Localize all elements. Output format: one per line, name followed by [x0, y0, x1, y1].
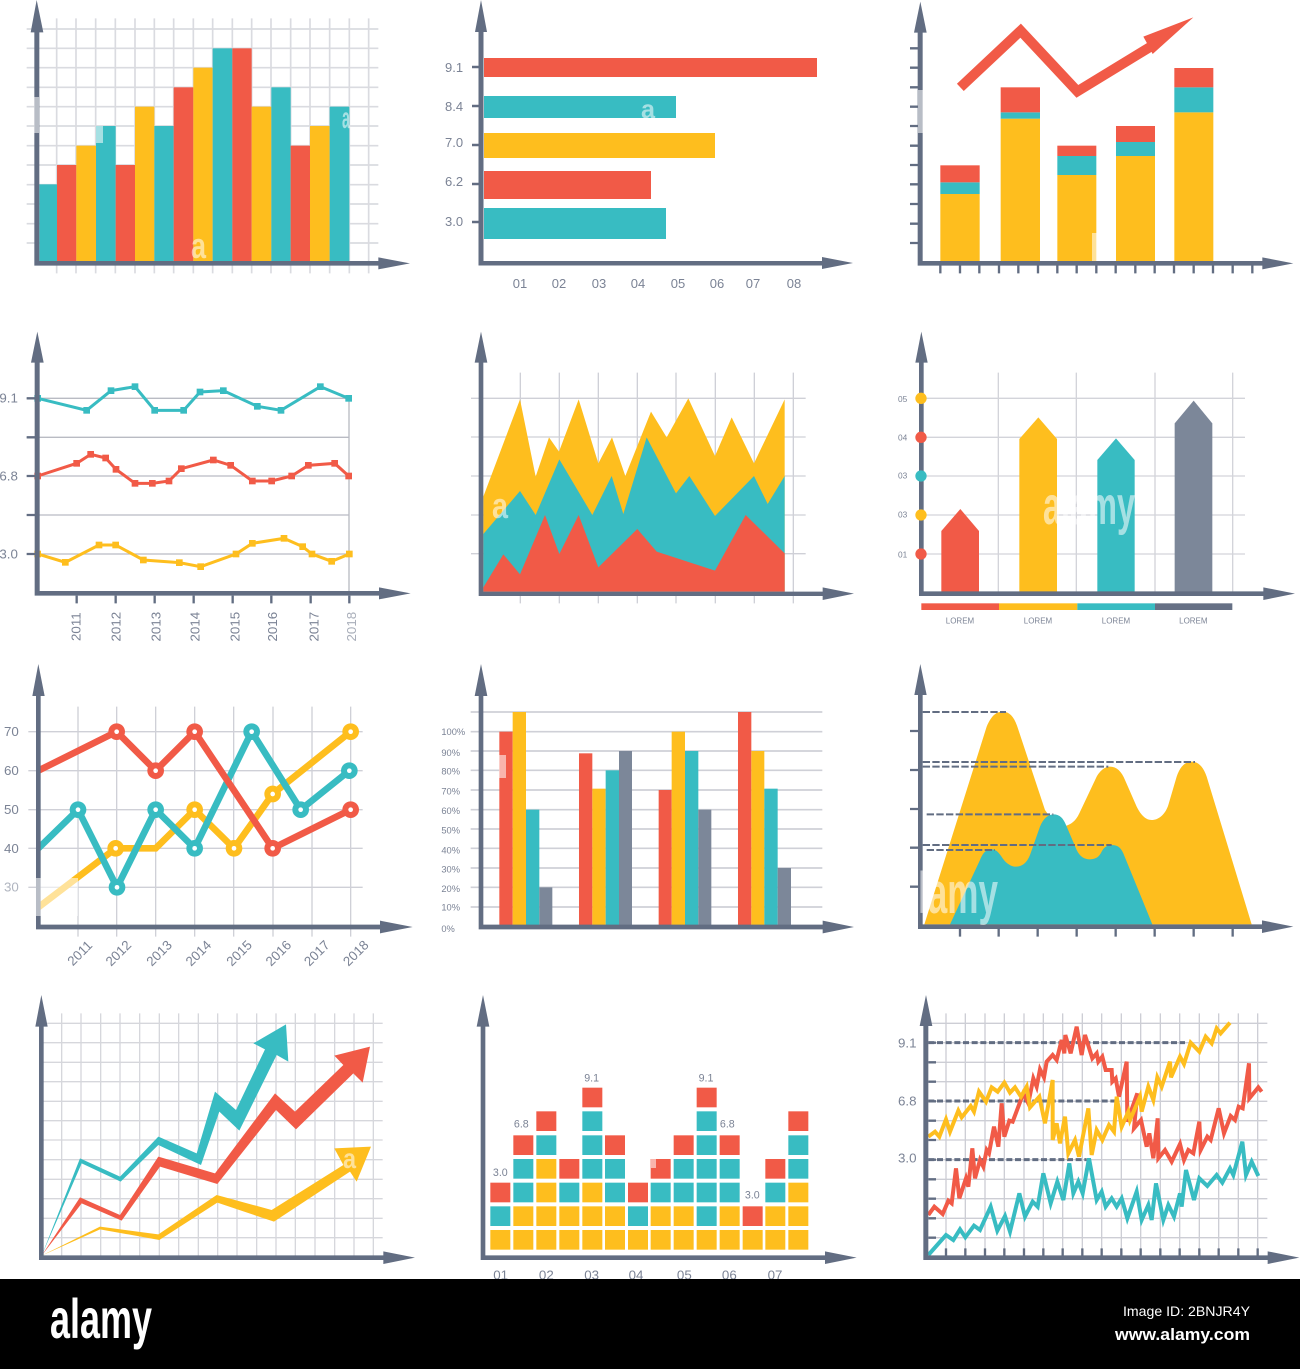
axis labels: 02: [539, 1267, 554, 1282]
value labels: 3.0: [493, 1167, 508, 1179]
axes: [32, 664, 413, 933]
year labels: 2011: [64, 938, 95, 969]
year labels: 2015: [228, 612, 243, 641]
axis labels: 01: [898, 550, 908, 560]
axis labels: 06: [710, 276, 724, 291]
percent labels: 60%: [441, 806, 460, 816]
watermark fragments: a: [342, 102, 350, 135]
value labels: [4, 724, 19, 894]
watermark fragments: lamy: [918, 861, 998, 926]
year labels: 2017: [306, 612, 321, 641]
yellow blocks: [490, 1159, 808, 1250]
percent labels: 40%: [441, 845, 460, 855]
axis labels: 04: [629, 1267, 644, 1282]
watermark fragments: alamy: [1043, 476, 1135, 536]
panel: horizontal bar chart: [445, 0, 853, 291]
axis labels: 07: [746, 276, 760, 291]
teal line: [928, 1142, 1258, 1255]
year labels: 2012: [103, 937, 134, 969]
year labels: [64, 937, 372, 969]
red line: [34, 451, 352, 487]
axis labels: 04: [631, 276, 645, 291]
panel: stacked area chart: [471, 332, 854, 603]
percent labels: 50%: [441, 825, 460, 835]
axis labels: [513, 276, 801, 291]
yellow line: [34, 535, 353, 570]
icon: yellow arrow: [42, 1147, 371, 1256]
value labels: 60: [4, 763, 19, 778]
footer bar: [0, 1279, 1300, 1369]
percent labels: 70%: [441, 787, 460, 797]
panel: grouped column chart: [27, 0, 410, 273]
axis labels: 05: [677, 1267, 692, 1282]
teal blocks: [490, 1111, 808, 1226]
percent labels: 100%: [441, 727, 465, 737]
value labels: 6.2: [445, 174, 463, 189]
year labels: 2013: [148, 612, 163, 641]
axis labels: 05: [898, 394, 908, 404]
watermark fragments: a: [343, 1143, 356, 1174]
year labels: 2014: [188, 611, 203, 641]
year labels: 2018: [340, 937, 372, 969]
axes: [475, 332, 854, 600]
panel: line chart with square markers: [0, 332, 411, 641]
dashed guide lines: [923, 712, 1195, 850]
percent labels: 90%: [441, 748, 460, 758]
yellow line: [928, 1023, 1230, 1157]
teal line: [38, 723, 358, 896]
axes: [914, 664, 1293, 933]
value labels: 6.8: [898, 1093, 917, 1108]
axis labels: 03: [584, 1267, 599, 1282]
value labels: [493, 1073, 760, 1202]
panel: block column chart: [477, 995, 857, 1282]
axis labels: 01: [513, 276, 527, 291]
red blocks: [490, 1088, 808, 1226]
legend: LOREM: [1179, 616, 1208, 625]
value labels: 8.4: [445, 99, 463, 114]
arrow columns: [941, 401, 1212, 592]
columns: [39, 48, 349, 261]
watermark fragments: a: [191, 225, 207, 266]
teal area: [950, 814, 1152, 924]
value labels: 6.8: [514, 1118, 529, 1130]
axes: [475, 0, 853, 269]
year labels: 2016: [263, 937, 294, 969]
dashed guide lines: [928, 1043, 1185, 1160]
value labels: 50: [4, 802, 19, 817]
legend: LOREM: [1024, 616, 1052, 625]
axis labels: 07: [768, 1267, 782, 1282]
value labels: 3.0: [898, 1151, 917, 1166]
axis labels: 03: [592, 276, 606, 291]
panel: percentage grouped columns: [441, 664, 854, 934]
red line: [928, 1027, 1262, 1215]
year labels: [68, 611, 359, 641]
percent labels: 30%: [441, 865, 460, 875]
icon: red arrow: [42, 1047, 370, 1256]
value labels: 3.0: [445, 214, 463, 229]
year labels: 2014: [183, 937, 215, 969]
axes: [35, 995, 415, 1264]
value labels: 30: [4, 879, 19, 894]
year labels: 2012: [108, 612, 123, 641]
bars: [484, 58, 817, 239]
legend: LOREM: [1102, 616, 1130, 625]
value labels: 70: [4, 724, 19, 739]
value labels: 9.1: [699, 1073, 713, 1085]
watermark fragments: [34, 90, 1135, 1174]
year labels: 2017: [301, 937, 333, 969]
percent labels: 80%: [441, 767, 460, 777]
axes: [31, 0, 410, 269]
percent labels: 0%: [441, 924, 455, 934]
panel: arrow columns with legend: [898, 332, 1295, 625]
panel: growth arrows chart: [35, 995, 415, 1264]
value labels: 40: [4, 841, 19, 856]
watermark fragments: a: [492, 485, 509, 526]
value labels: [898, 1035, 917, 1166]
columns: [499, 712, 791, 925]
axes: [920, 995, 1299, 1264]
icon: trend arrow: [960, 17, 1193, 91]
panel: stacked columns with trend arrow: [910, 2, 1293, 273]
axis labels: 06: [722, 1267, 737, 1282]
year labels: 2018: [344, 612, 359, 641]
website: www.alamy.com: [1114, 1325, 1250, 1344]
value labels: [445, 60, 463, 229]
year labels: 2015: [223, 937, 255, 969]
yellow area: [483, 398, 785, 592]
icon: teal arrow: [42, 1024, 288, 1256]
value labels: 9.1: [584, 1073, 599, 1085]
axis labels: 04: [898, 433, 908, 443]
axis labels: 01: [493, 1267, 508, 1282]
axis labels: [898, 394, 908, 560]
axis dots: [915, 393, 927, 560]
axis labels: 05: [671, 276, 685, 291]
value labels: 7.0: [445, 135, 463, 150]
axes: [477, 995, 857, 1264]
legend: [921, 603, 1232, 625]
red area: [483, 515, 785, 592]
yellow area: [924, 712, 1252, 924]
percent labels: 10%: [441, 903, 460, 913]
axes: [475, 664, 854, 933]
stacked columns: [940, 68, 1213, 262]
footer logo: alamy: [50, 1287, 152, 1350]
value labels: 3.0: [745, 1190, 760, 1202]
axes: [914, 2, 1293, 269]
panel: volatile multi-line chart: [898, 995, 1299, 1264]
axis labels: 03: [898, 471, 908, 481]
year labels: 2016: [265, 612, 280, 641]
red line: [38, 723, 359, 857]
value labels: 9.1: [898, 1035, 917, 1050]
axes: [31, 332, 411, 599]
image id: Image ID: 2BNJR4Y: [1123, 1303, 1251, 1319]
percent labels: 20%: [441, 884, 460, 894]
panel: smooth area chart: [910, 664, 1293, 937]
axes: [915, 332, 1295, 600]
panel: line chart with ring markers: [4, 664, 413, 969]
percent labels: [441, 727, 465, 934]
axis labels: 03: [898, 509, 908, 519]
year labels: 2011: [68, 612, 83, 641]
yellow line: [38, 723, 359, 907]
axis labels: 08: [787, 276, 801, 291]
value labels: [0, 390, 18, 561]
year labels: 2013: [143, 937, 175, 969]
legend: LOREM: [946, 616, 974, 625]
axis labels: 02: [552, 276, 566, 291]
value labels: 6.8: [720, 1118, 735, 1130]
value labels: 9.1: [445, 60, 463, 75]
teal line: [34, 383, 352, 414]
axis labels: [493, 1267, 782, 1282]
teal area: [483, 437, 785, 592]
watermark fragments: a: [641, 94, 656, 124]
